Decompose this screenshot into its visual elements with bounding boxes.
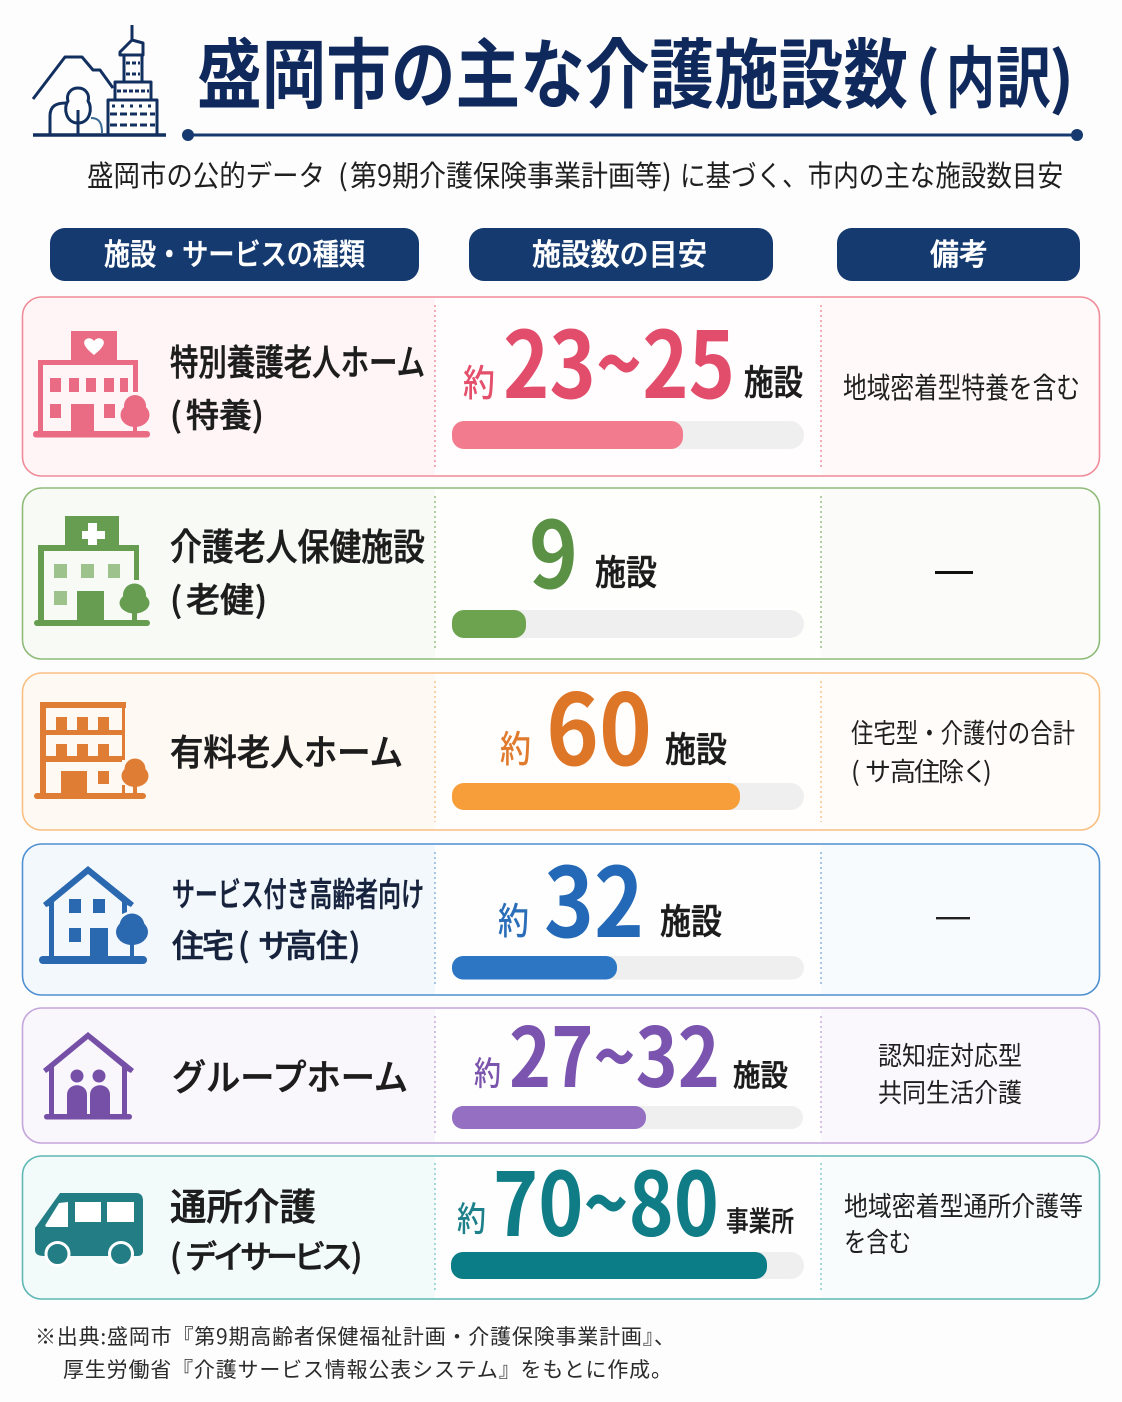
count: roken [529,482,657,615]
label: sakoju: 住宅(サ高住) [172,921,360,967]
bar: group home [452,1106,803,1129]
label: sakoju [172,868,424,967]
subtitle [87,153,1063,195]
footnote: 厚生労働省『介護サービス情報公表システム』をもとに作成。 [63,1354,672,1384]
title suffix [915,25,1074,122]
count: tokuyo: 約 [463,353,495,407]
bar: tokuyo [452,421,804,449]
note: day service: 地域密着型通所介護等 [844,1185,1083,1224]
count: yuryo: 約 [500,719,531,773]
count: roken: 施設 [595,545,657,596]
icon: house with two people [43,1032,134,1120]
count: tokuyo: 23~25 [503,292,735,425]
note: yuryo: (サ高住除く) [851,752,992,789]
column header: type [50,228,419,281]
count: sakoju: 施設 [660,894,722,945]
note: yuryo [851,712,1075,789]
title underline with dots [182,129,1083,141]
column header: notes: 備考 [930,230,988,274]
label: sakoju: サービス付き高齢者向け [172,868,424,916]
label: yuryo: 有料老人ホーム [170,724,403,776]
bar: roken [452,610,804,638]
note: group home [878,1036,1022,1110]
count: group home: 27~32 [509,992,720,1111]
icon: apartment building [34,702,148,799]
count: sakoju: 32 [544,826,644,965]
title: 盛岡市の主な介護施設数 [197,14,908,124]
note: yuryo: 住宅型・介護付の合計 [851,712,1075,751]
title suffix: ( [915,25,940,122]
label: tokuyo: 特別養護老人ホーム [170,334,425,386]
column header: type: 施設・サービスの種類 [104,230,365,274]
label: day service: 通所介護 [170,1177,316,1231]
icon: house with tree [39,866,148,964]
panel: sakoju [22,826,1100,995]
panel: roken [22,482,1100,659]
bar: yuryo [452,783,804,810]
subtitle: 盛岡市の公的データ [87,153,325,195]
icon: day service van [35,1193,143,1266]
subtitle: ( [338,153,348,195]
count: yuryo: 60 [546,652,652,794]
note: group home: 共同生活介護 [878,1073,1022,1110]
count: group home: 約 [474,1047,501,1095]
column header: count [469,228,773,281]
note: day service: を含む [844,1221,911,1260]
title suffix: ) [1049,25,1074,122]
count: group home: 施設 [733,1051,788,1095]
title suffix: 訳 [996,25,1051,122]
title suffix: 内 [946,25,995,122]
label: group home: グループホーム [172,1049,408,1101]
note: group home: 認知症対応型 [878,1036,1022,1073]
footnote [35,1321,675,1384]
icon: health facility with cross [34,516,150,626]
column header: notes [837,228,1080,281]
subtitle: に基づく、市内の主な施設数目安 [680,153,1063,195]
subtitle: 第9期介護保険事業計画等 [350,153,662,195]
label: day service [170,1177,362,1278]
panel: group home [22,992,1100,1143]
count: day service: 事業所 [726,1200,794,1240]
note: day service [844,1185,1083,1260]
label: roken: (老健) [170,573,267,622]
count: tokuyo: 施設 [744,355,803,406]
count: day service: 70~80 [493,1135,719,1262]
count: day service: 約 [457,1192,486,1241]
panel: tokuyo [22,292,1100,476]
icon: nursing home with heart [33,331,150,438]
subtitle: ) [662,153,672,195]
bar: sakoju [452,956,804,980]
count: sakoju [498,826,722,965]
panel: day service [22,1135,1100,1299]
label: roken: 介護老人保健施設 [170,517,425,571]
count: roken: 9 [529,482,578,615]
count: yuryo: 施設 [665,722,727,773]
label: tokuyo [170,334,425,437]
note: roken dash [935,571,973,574]
count: yuryo [500,652,727,794]
note: sakoju dash [936,917,970,919]
logo: Morioka mountain and tower [33,25,166,135]
label: tokuyo: (特養) [170,389,264,437]
count: sakoju: 約 [498,891,529,945]
label: roken [170,517,425,622]
label: day service: (デイサービス) [170,1232,362,1278]
panel: yuryo [22,652,1100,830]
bar: day service [451,1252,804,1279]
column header: count: 施設数の目安 [532,230,707,274]
footnote: ※出典:盛岡市『第9期高齢者保健福祉計画・介護保険事業計画』、 [35,1321,675,1351]
